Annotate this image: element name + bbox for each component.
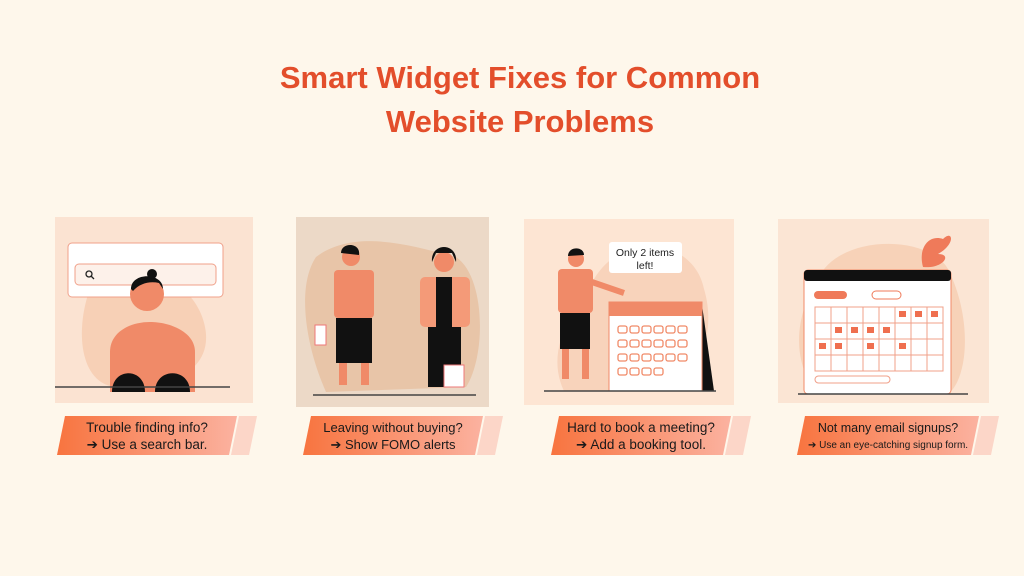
banner 4: Not many email signups? <box>818 421 958 435</box>
form window <box>804 270 951 394</box>
banner 1 <box>57 416 257 455</box>
banner 1: ➔ Use a search bar. <box>87 437 207 452</box>
banner 2 <box>303 416 503 455</box>
banner 4: ➔ Use an eye-catching signup form. <box>808 440 968 451</box>
man <box>315 245 374 385</box>
banner 2: ➔ Show FOMO alerts <box>330 437 456 452</box>
banner 4 <box>797 416 999 455</box>
person <box>558 248 624 379</box>
panel: booking <box>524 219 734 405</box>
callout: Only 2 items <box>616 247 674 259</box>
panel: signup form <box>778 219 989 403</box>
calendar <box>609 302 714 391</box>
title: Website Problems <box>386 104 654 139</box>
banner 3: ➔ Add a booking tool. <box>576 437 706 452</box>
title <box>280 60 760 139</box>
title: Smart Widget Fixes for Common <box>280 60 760 95</box>
woman <box>420 247 470 387</box>
banner 1: Trouble finding info? <box>86 420 208 435</box>
callout <box>609 242 682 273</box>
panel: FOMO <box>296 217 489 407</box>
icon: leaf <box>922 236 951 267</box>
callout: left! <box>637 260 653 272</box>
banner 3 <box>551 416 751 455</box>
panel: search bar <box>55 217 253 403</box>
person <box>110 269 195 392</box>
banner 2: Leaving without buying? <box>323 420 463 435</box>
search box <box>68 243 223 297</box>
banner 3: Hard to book a meeting? <box>567 420 715 435</box>
